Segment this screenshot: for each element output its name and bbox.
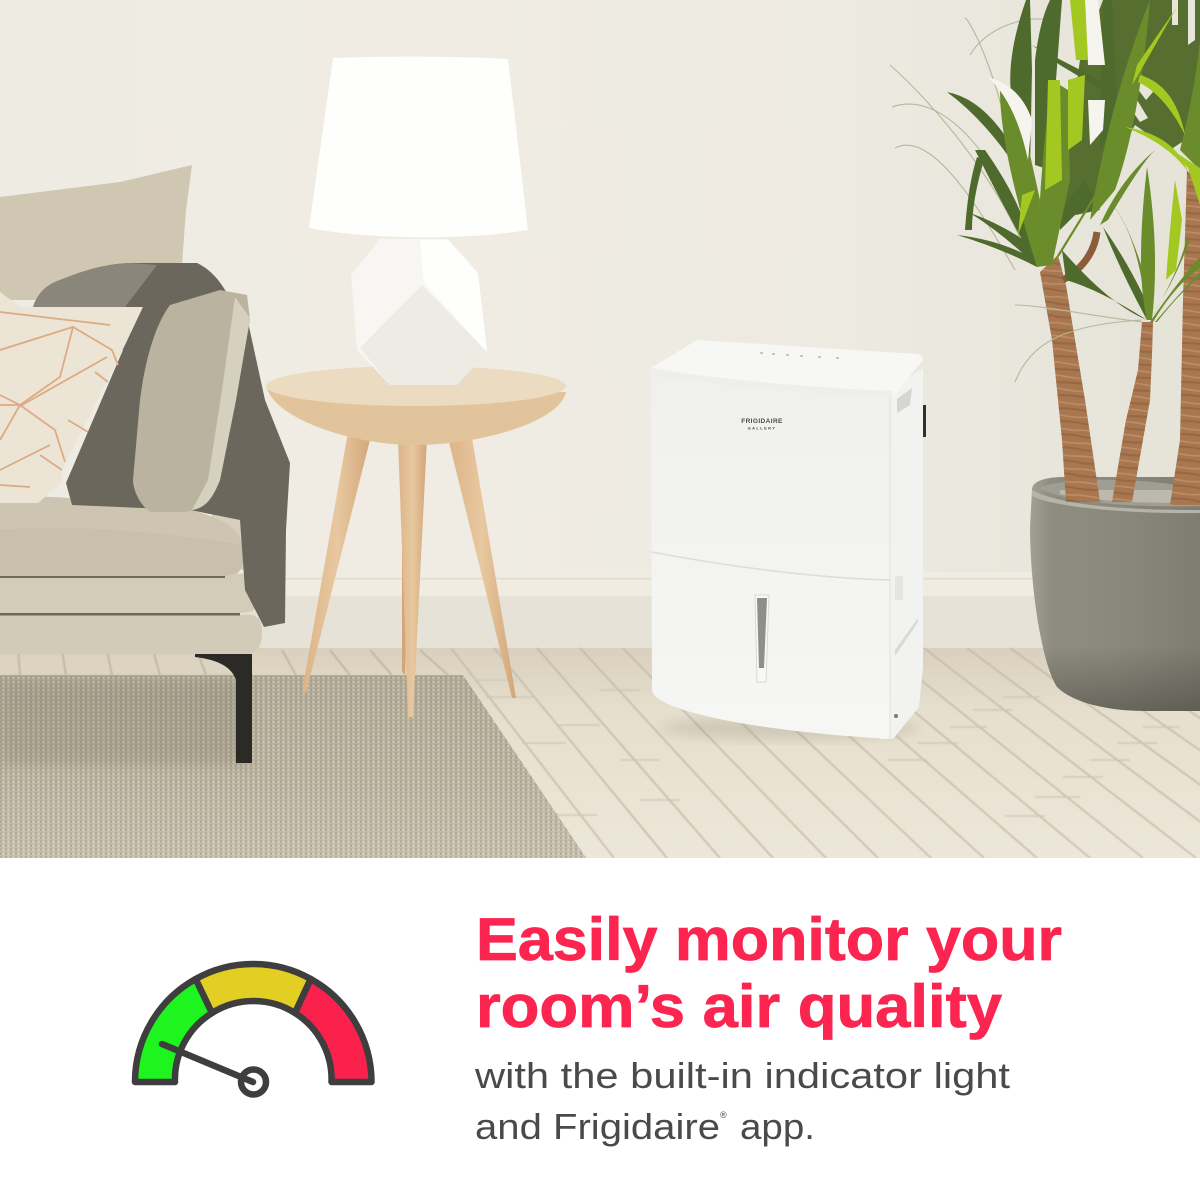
sofa back cushion [0, 165, 192, 300]
lower cushion two [0, 614, 262, 654]
headline: room’s air quality [476, 973, 1003, 1040]
headline: Easily monitor your [476, 906, 1062, 973]
mid green leaves [1000, 0, 1200, 322]
table legs [302, 432, 516, 717]
table lamp [309, 57, 528, 385]
lid [651, 340, 923, 397]
seat cushion [0, 496, 244, 577]
lamp shade [309, 57, 528, 237]
floor shadow [660, 716, 920, 740]
body text: app. [740, 1106, 815, 1147]
dark grey blanket [33, 263, 290, 627]
table top [266, 366, 566, 406]
wall gaps between leaves [1127, 0, 1195, 122]
lamp base [351, 239, 487, 385]
side panel [880, 368, 923, 739]
side handle [897, 388, 912, 413]
baseboard [0, 572, 1200, 648]
body seam [652, 552, 890, 580]
body text: with the built-in indicator light [474, 1055, 1010, 1096]
side table [266, 366, 566, 717]
plant pot [1030, 477, 1200, 711]
brand logo: GALLERY [748, 426, 776, 430]
headline [476, 906, 1062, 1040]
caster dot [894, 714, 898, 718]
sofa arm [212, 340, 245, 570]
trunk middle [1112, 322, 1153, 502]
sofa leg [195, 654, 252, 763]
beige blanket fold [133, 290, 250, 512]
brand logo: FRIGIDAIRE [741, 418, 783, 425]
water level window [755, 595, 769, 682]
control panel indicators [760, 353, 839, 358]
leaves [890, 0, 1200, 382]
dark green leaves [947, 0, 1150, 320]
lower side slot [895, 618, 918, 656]
wood plank floor [0, 648, 1200, 859]
body text: and Frigidaire [475, 1106, 720, 1147]
sofa [0, 165, 262, 763]
side black bar [923, 405, 926, 437]
front panel [651, 375, 890, 739]
gauge yellow segment [196, 964, 311, 1013]
table edge [267, 388, 566, 445]
throw blanket [33, 263, 290, 627]
trunk left [1040, 255, 1100, 502]
dark leaf mass [1060, 0, 1200, 215]
potted plant [890, 0, 1200, 711]
thin pale leaves [890, 18, 1142, 382]
wall [0, 0, 1200, 650]
white highlight leaves [987, 0, 1105, 160]
trunk right [1170, 170, 1200, 505]
brand logo [741, 418, 783, 430]
icon: air quality gauge [135, 964, 372, 1094]
gauge needle [162, 1044, 253, 1082]
trunks [1040, 170, 1200, 505]
lime leaves [1018, 0, 1200, 280]
gauge green segment [135, 979, 212, 1082]
branch [1063, 232, 1097, 280]
photo scene: living room [0, 0, 1200, 859]
body text [474, 1055, 1010, 1147]
gauge red segment [295, 979, 372, 1082]
dehumidifier [651, 340, 926, 740]
lower cushion one [0, 574, 261, 613]
gauge hub [241, 1070, 266, 1094]
body text: ® [720, 1110, 727, 1120]
rug [0, 675, 587, 859]
side panel edge shade [889, 398, 891, 739]
white caption panel [0, 858, 1200, 1200]
patterned pillow [0, 292, 143, 503]
side vent [895, 576, 903, 600]
